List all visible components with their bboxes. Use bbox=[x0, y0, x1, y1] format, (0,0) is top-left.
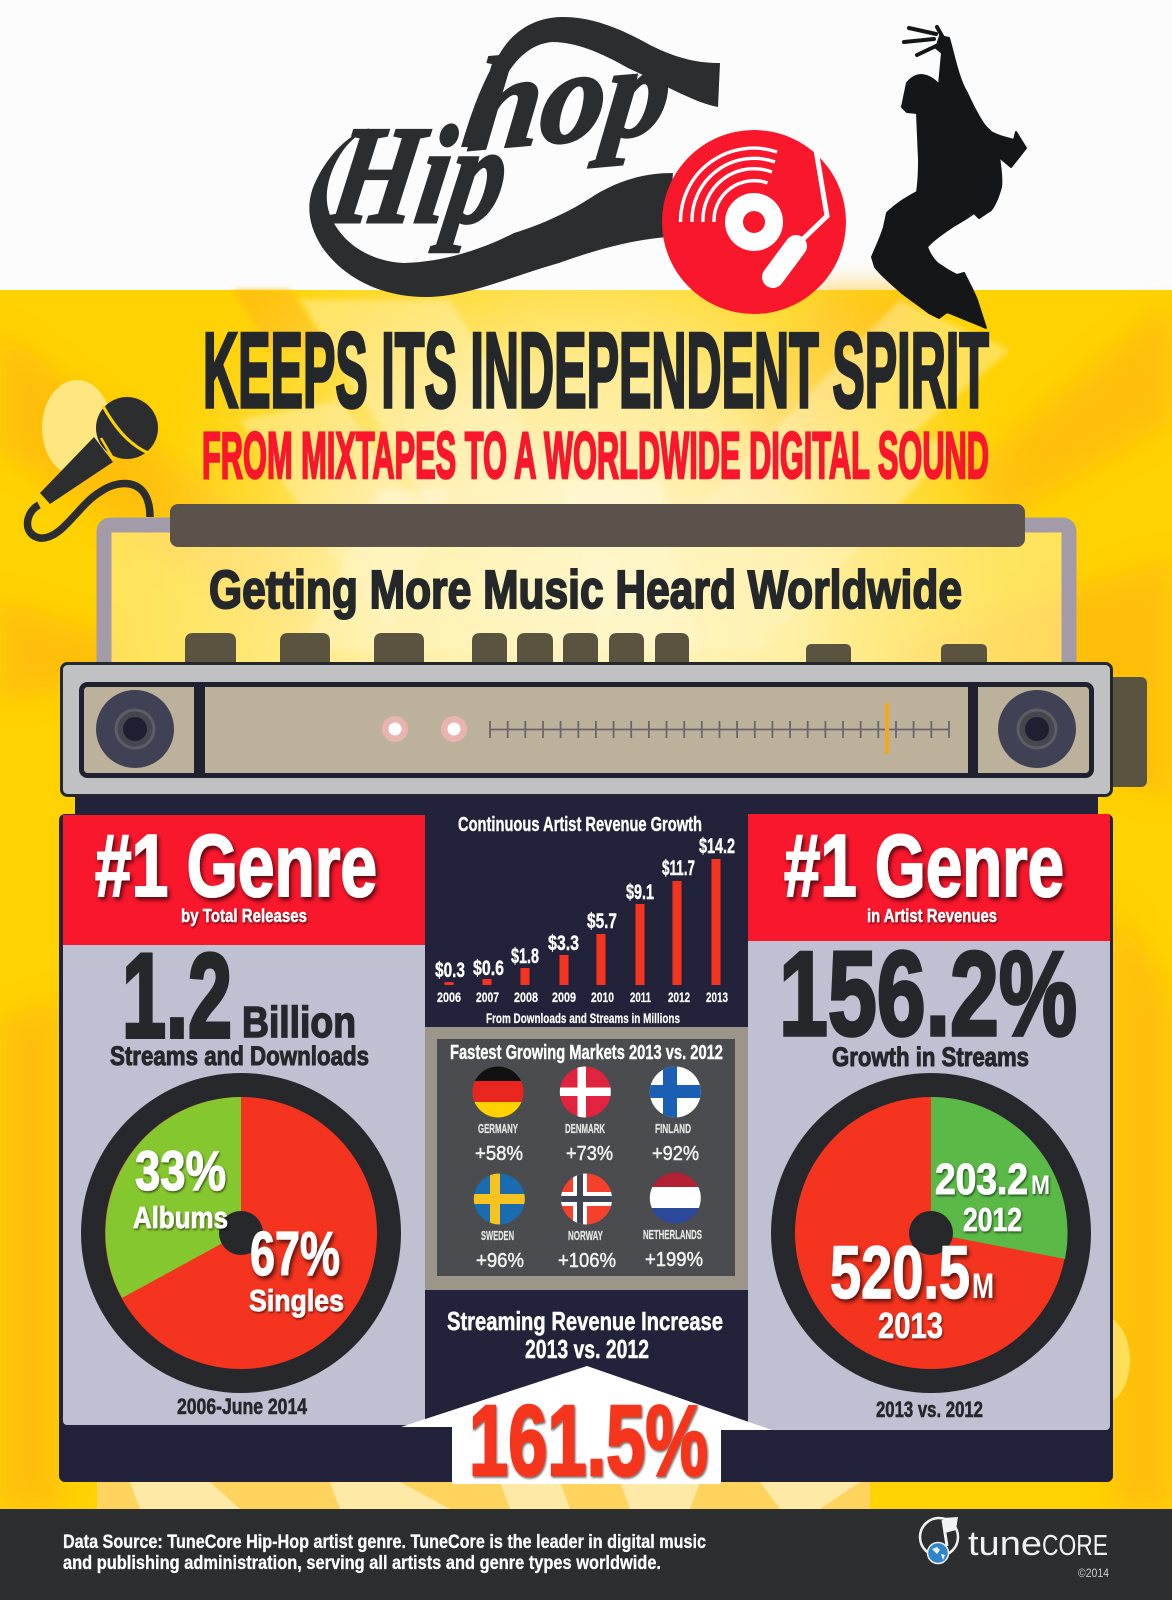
label: 67%: 67% bbox=[250, 1220, 340, 1289]
copyright: ©2014 bbox=[1078, 1566, 1109, 1580]
label: 2012: 2012 bbox=[963, 1201, 1022, 1238]
stat: 161.5%: 161.5% bbox=[469, 1385, 708, 1497]
growth percentages: +96% bbox=[476, 1250, 524, 1272]
value labels: $3.3 bbox=[548, 932, 579, 955]
caption: comparison period: 2013 vs. 2012 bbox=[876, 1397, 983, 1422]
label: 203.2M: 203.2 bbox=[935, 1155, 1028, 1204]
flag: Norway bbox=[561, 1174, 612, 1224]
year labels: 2008 bbox=[514, 989, 538, 1005]
data source note: and publishing administration, serving all artists and genre types worldwide. bbox=[63, 1553, 661, 1574]
year labels: 2012 bbox=[668, 989, 690, 1005]
chart heading: Continuous Artist Revenue Growth bbox=[458, 814, 702, 836]
indicator lights bbox=[382, 716, 467, 742]
year labels: 2009 bbox=[552, 989, 576, 1005]
pie chart: streams 2012 vs 2013 bbox=[771, 1073, 1091, 1393]
bar chart: continuous artist revenue growth bbox=[435, 814, 735, 1026]
flag: Finland bbox=[650, 1066, 701, 1118]
data source note bbox=[63, 1532, 706, 1574]
caption: Streams and Downloads: Streams and Downloads bbox=[110, 1041, 369, 1071]
flag: Sweden bbox=[474, 1174, 525, 1224]
icon: jumping dancer silhouette bbox=[872, 27, 1026, 328]
value labels: $5.7 bbox=[587, 910, 617, 933]
label: 520.5M: M bbox=[972, 1267, 994, 1306]
carrying bar bbox=[170, 504, 1025, 547]
country labels bbox=[478, 1121, 702, 1243]
hop wordmark: hop bbox=[462, 16, 680, 179]
growth percentages: +73% bbox=[566, 1143, 613, 1165]
heading: Getting More Music Heard Worldwide: Getting More Music Heard Worldwide bbox=[209, 560, 962, 620]
data source note: Data Source: TuneCore Hip-Hop artist genre. TuneCore is the leader in digital music bbox=[63, 1532, 706, 1553]
subheading: 2013 vs. 2012 bbox=[525, 1334, 649, 1364]
stat unit: Billion: Billion bbox=[242, 998, 356, 1047]
panel heading: Fastest Growing Markets 2013 vs. 2012 bbox=[450, 1042, 723, 1064]
heading: #1 Genre: #1 Genre bbox=[95, 816, 377, 915]
Hip wordmark: Hip bbox=[319, 97, 520, 253]
left speaker bbox=[96, 690, 174, 768]
caption: Growth in Streams: Growth in Streams bbox=[832, 1042, 1029, 1072]
year labels bbox=[437, 989, 728, 1005]
boombox bbox=[62, 504, 1147, 796]
value labels: $9.1 bbox=[626, 881, 654, 904]
bottom light stripes bbox=[97, 1482, 870, 1509]
value labels bbox=[435, 835, 735, 982]
panel: total releases bbox=[63, 815, 425, 1425]
stat: 1.2: 1.2 bbox=[122, 929, 232, 1063]
tuning scale bbox=[490, 703, 949, 754]
label: 33%: 33% bbox=[135, 1139, 226, 1202]
footer bbox=[0, 1509, 1172, 1600]
year labels: 2013 bbox=[706, 989, 728, 1005]
value labels: $0.6 bbox=[473, 957, 504, 980]
label: Albums: Albums bbox=[133, 1200, 228, 1235]
value labels: $1.8 bbox=[511, 945, 539, 968]
value labels: $0.3 bbox=[435, 959, 465, 982]
label: Singles: Singles bbox=[249, 1283, 344, 1318]
pie chart: albums vs singles bbox=[81, 1073, 401, 1393]
lower ribbon bbox=[309, 128, 673, 297]
label: 2013: 2013 bbox=[878, 1305, 943, 1346]
icon: red vinyl turntable bbox=[662, 130, 846, 314]
label: 203.2M: M bbox=[1031, 1170, 1050, 1200]
logo: TuneCore: tune bbox=[968, 1525, 1042, 1563]
handle bbox=[104, 525, 1069, 662]
caption: in Artist Revenues: in Artist Revenues bbox=[867, 906, 997, 926]
tuning buttons bbox=[185, 633, 987, 662]
bars bbox=[444, 859, 720, 985]
country labels: NETHERLANDS bbox=[643, 1227, 702, 1242]
year labels: 2006 bbox=[437, 989, 461, 1005]
caption: by Total Releases: by Total Releases bbox=[181, 906, 307, 926]
flag: Netherlands bbox=[650, 1172, 701, 1224]
year labels: 2007 bbox=[476, 989, 499, 1005]
value labels: $14.2 bbox=[699, 835, 735, 858]
year labels: 2010 bbox=[591, 989, 614, 1005]
growth percentages bbox=[475, 1143, 703, 1272]
heading: #1 Genre: #1 Genre bbox=[784, 816, 1064, 915]
side knob bbox=[1100, 677, 1147, 787]
dial panel bbox=[82, 684, 1092, 776]
panel: artist revenues bbox=[748, 814, 1110, 1430]
up arrow bbox=[401, 1366, 772, 1484]
body bbox=[62, 664, 1112, 796]
logo: TuneCore: CORE bbox=[1042, 1530, 1108, 1562]
country labels: DENMARK bbox=[565, 1121, 605, 1136]
panel: streaming revenue increase bbox=[401, 1306, 772, 1497]
country labels: FINLAND bbox=[655, 1121, 691, 1136]
right speaker bbox=[998, 690, 1076, 768]
chart footnote: From Downloads and Streams in Millions bbox=[486, 1010, 680, 1026]
logo: Hip hop lettering with ribbon bbox=[309, 16, 720, 297]
growth percentages: +199% bbox=[645, 1249, 703, 1271]
growth percentages: +58% bbox=[475, 1143, 523, 1165]
year labels: 2011 bbox=[630, 989, 651, 1005]
country labels: SWEDEN bbox=[481, 1228, 514, 1243]
fingers bbox=[904, 27, 942, 55]
caption: date range: 2006-June 2014 bbox=[177, 1394, 308, 1419]
flag: Denmark bbox=[560, 1066, 611, 1118]
country labels: NORWAY bbox=[568, 1228, 603, 1243]
flag: Germany bbox=[472, 1066, 524, 1118]
boombox lower body bbox=[59, 796, 1113, 1482]
panel: fastest growing markets bbox=[425, 1027, 748, 1290]
icon: microphone bbox=[27, 397, 158, 538]
growth percentages: +92% bbox=[652, 1143, 699, 1165]
value labels: $11.7 bbox=[662, 857, 695, 880]
country labels: GERMANY bbox=[478, 1121, 518, 1136]
ribbon bbox=[461, 17, 720, 147]
label: 520.5M: 520.5 bbox=[830, 1231, 970, 1314]
growth percentages: +106% bbox=[558, 1250, 616, 1272]
logo: TuneCore bbox=[920, 1517, 1108, 1564]
heading: Streaming Revenue Increase bbox=[447, 1306, 723, 1336]
yellow spotlight background bbox=[0, 290, 1172, 1510]
